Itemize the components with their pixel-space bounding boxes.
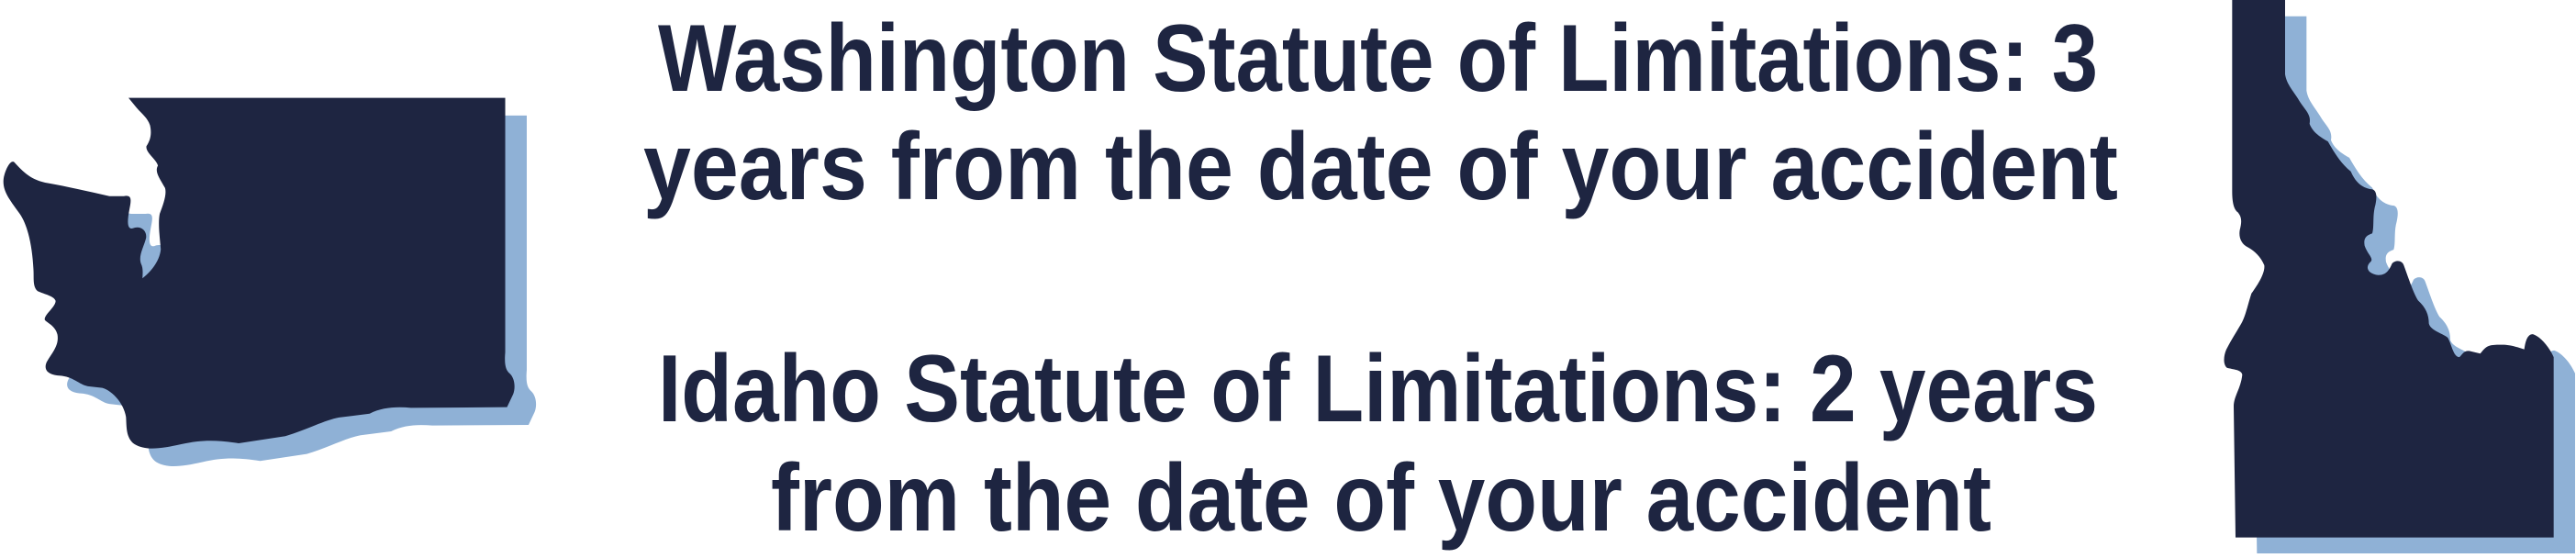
text block: statutes of limitations: from the date of your accident bbox=[771, 445, 1991, 552]
icon: idaho state map bbox=[2225, 0, 2575, 553]
text block: statutes of limitations bbox=[643, 6, 2118, 552]
icon: washington state map bbox=[4, 97, 536, 466]
